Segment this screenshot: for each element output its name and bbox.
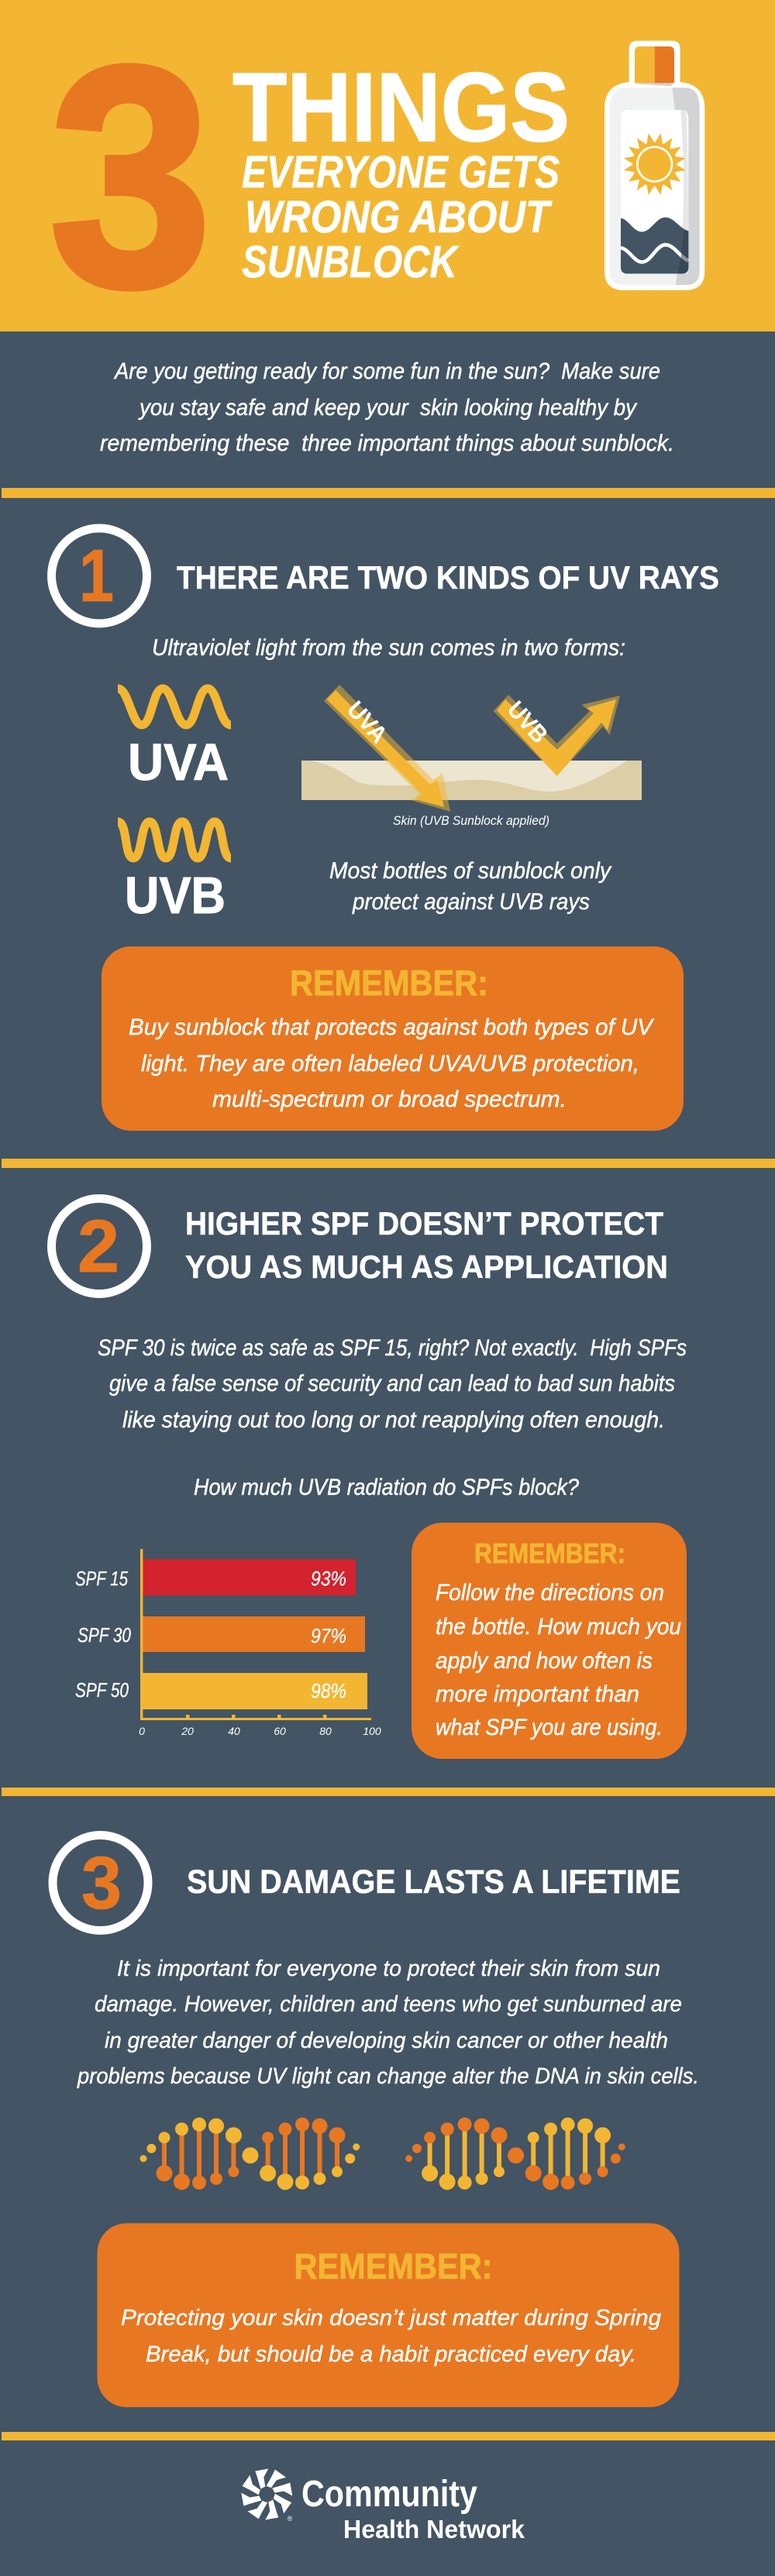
paragraph: sun damage [77, 1956, 699, 2089]
UVA label: UVA [128, 733, 229, 792]
number badge 3 [53, 1836, 148, 1930]
panel: section 3 [53, 1836, 699, 2407]
bar: SPF 50 98%: 98% [311, 1679, 346, 1702]
intro text [100, 359, 674, 456]
callout: remember 3: Protecting your skin doesn’t just matter during Spring [121, 2306, 661, 2330]
subtitle: WRONG ABOUT [245, 192, 553, 242]
divider stripe 2 [2, 1159, 775, 1168]
divider stripe 3 [2, 1788, 775, 1796]
arrow: UVB reflected [493, 695, 620, 776]
heading: higher SPF [185, 1205, 668, 1285]
number badge 2: 2 [78, 1205, 119, 1288]
icon: UVB wave [118, 822, 231, 858]
callout: remember 1: REMEMBER: [290, 963, 488, 1003]
callout: remember 1: Buy sunblock that protects against both types of UV [129, 1015, 655, 1040]
bar: SPF 50 98% [75, 1673, 367, 1709]
axis labels: 80 [319, 1725, 332, 1737]
bar: SPF 15 93%: 93% [311, 1567, 346, 1590]
callout: remember 2 [412, 1523, 687, 1759]
note: bottles: protect against UVB rays [352, 889, 590, 915]
icon: UVA wave [118, 689, 231, 725]
heading: sun damage: SUN DAMAGE LASTS A LIFETIME [187, 1863, 680, 1901]
paragraph: sun damage: damage. However, children and teens who get sunburned are [95, 1992, 682, 2017]
title: things: THINGS [232, 53, 570, 162]
lead text: Ultraviolet light from the sun comes in two forms: [152, 635, 625, 661]
paragraph: sun damage: It is important for everyone to protect their skin from sun [117, 1956, 660, 1981]
axis labels [139, 1725, 381, 1737]
subtitle: EVERYONE GETS [242, 147, 560, 197]
subtitle [242, 147, 560, 287]
panel: section 2 [51, 1199, 687, 1759]
skin diagram [301, 685, 642, 828]
wordmark [301, 2474, 525, 2543]
icon: DNA helix right [405, 2117, 625, 2190]
UVB label: UVB [125, 867, 226, 925]
wordmark: Health Network [343, 2515, 525, 2543]
bar: SPF 30 97%: SPF 30 [78, 1623, 131, 1647]
callout: remember 3 [98, 2223, 679, 2407]
paragraph: SPF explanation: give a false sense of security and can lead to bad sun habits [109, 1371, 675, 1396]
skin caption: Skin (UVB Sunblock applied) [393, 813, 549, 828]
callout: remember 2: the bottle. How much you [436, 1614, 681, 1640]
icon: DNA helix left [140, 2117, 360, 2190]
icon: logo mark [240, 2468, 293, 2520]
note: bottles: Most bottles of sunblock only [329, 858, 612, 884]
number badge 3: 3 [81, 1842, 122, 1925]
wordmark: Community [301, 2474, 477, 2515]
bar: SPF 30 97% [78, 1616, 365, 1652]
callout: remember 2: Follow the directions on [436, 1580, 664, 1606]
callout: remember 1: light. They are often labeled UVA/UVB protection, [141, 1051, 639, 1077]
callout: remember 1: multi-spectrum or broad spectrum. [212, 1087, 567, 1112]
callout: remember 2: apply and how often is [436, 1648, 653, 1674]
bar: SPF 50 98%: SPF 50 [75, 1678, 129, 1702]
paragraph: sun damage: in greater danger of developing skin cancer or other health [105, 2028, 668, 2053]
subtitle: SUNBLOCK [242, 237, 460, 287]
arrow: UVA penetrates skin: UVA [342, 696, 393, 748]
arrow: UVB reflected: UVB [502, 696, 553, 748]
chart title: How much UVB radiation do SPFs block? [194, 1475, 579, 1500]
callout: remember 3: Break, but should be a habit practiced every day. [146, 2342, 636, 2367]
icon: sunblock bottle [604, 41, 704, 290]
axis labels: 100 [363, 1725, 381, 1737]
number badge 1: 1 [79, 534, 114, 617]
paragraph: SPF explanation: SPF 30 is twice as safe as SPF 15, right? Not exactly. High SPFs [98, 1335, 687, 1361]
paragraph: sun damage: problems because UV light can change alter the DNA in skin cells. [77, 2064, 699, 2089]
bar: SPF 15 93%: SPF 15 [75, 1567, 128, 1590]
bar chart: UVB blocked by SPF [75, 1549, 381, 1737]
paragraph: SPF explanation [98, 1335, 687, 1433]
logo: Community Health Network [240, 2468, 525, 2543]
heading: two kinds of UV rays: THERE ARE TWO KINDS OF UV RAYS [177, 559, 719, 596]
divider stripe 1 [2, 488, 775, 498]
divider stripe 4 [2, 2432, 775, 2440]
heading: higher SPF: YOU AS MUCH AS APPLICATION [185, 1249, 668, 1285]
registered mark: ® [288, 2515, 293, 2523]
axis labels: 40 [228, 1725, 240, 1737]
paragraph: SPF explanation: like staying out too long or not reapplying often enough. [122, 1407, 665, 1433]
bar: SPF 30 97%: 97% [311, 1624, 346, 1647]
chart axes [140, 1549, 371, 1720]
intro text: remembering these three important things about sunblock. [100, 431, 674, 456]
callout: remember 2: what SPF you are using. [436, 1715, 663, 1740]
axis labels: 0 [139, 1725, 145, 1737]
callout: remember 1 [102, 946, 684, 1131]
arrow: UVA penetrates skin [324, 685, 450, 812]
big number 3: 3 [50, 1, 212, 352]
bar: SPF 15 93% [75, 1559, 356, 1595]
intro text: you stay safe and keep your skin looking healthy by [138, 395, 638, 421]
callout: remember 2: REMEMBER: [474, 1537, 625, 1569]
callout: remember 2: more important than [436, 1681, 639, 1707]
axis labels: 60 [274, 1725, 286, 1737]
panel: section 1 [51, 528, 719, 1131]
axis labels: 20 [181, 1725, 194, 1737]
callout: remember 3: REMEMBER: [294, 2246, 493, 2286]
number badge 2 [51, 1199, 147, 1293]
heading: higher SPF: HIGHER SPF DOESN’T PROTECT [185, 1205, 663, 1242]
header panel [0, 0, 775, 352]
intro text: Are you getting ready for some fun in the sun? Make sure [113, 359, 660, 384]
number badge 1 [51, 528, 147, 623]
note: bottles [329, 858, 612, 915]
